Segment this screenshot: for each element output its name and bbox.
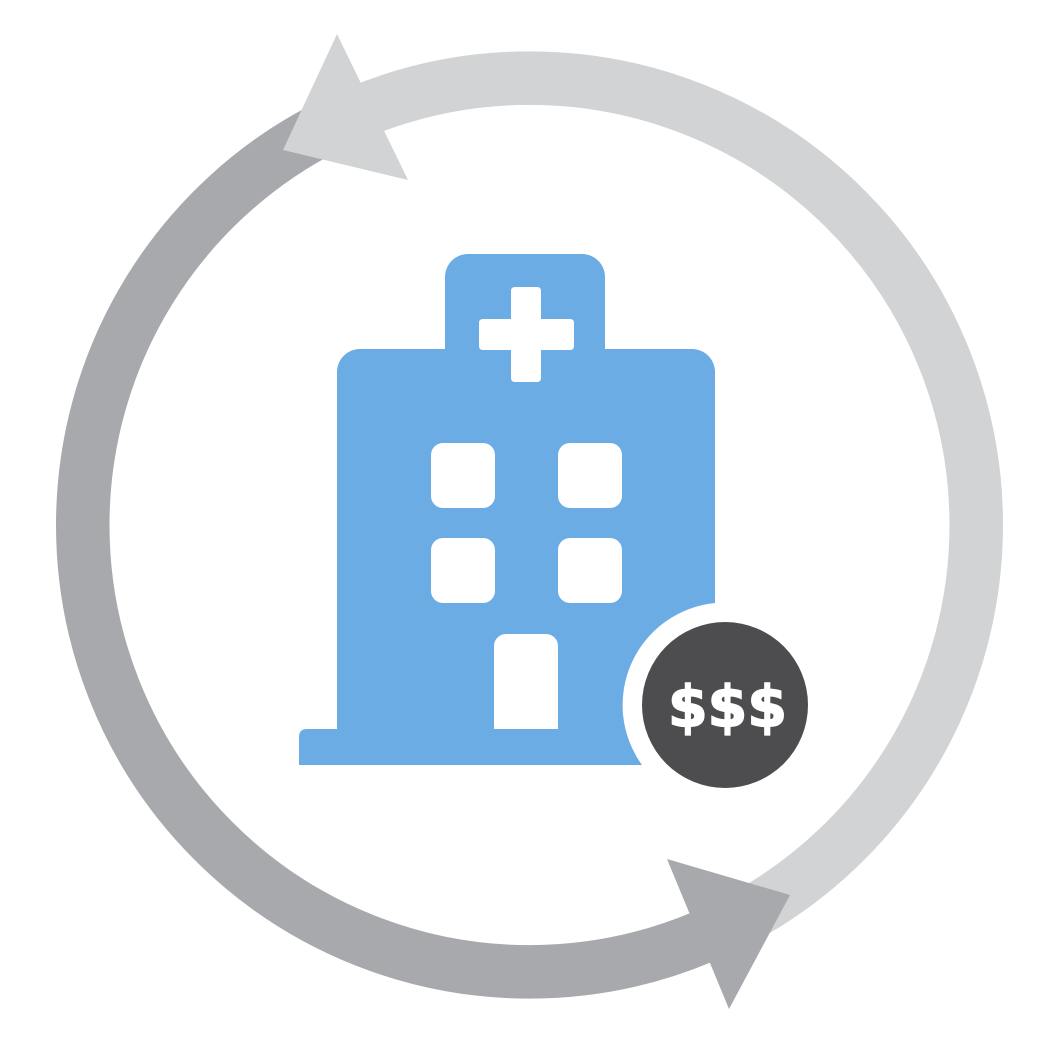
icon: medical cross: [479, 287, 574, 382]
icon: hospital building: [299, 254, 715, 765]
badge: cost circle: [642, 622, 808, 788]
text: dollar signs: $$$: [668, 674, 787, 740]
arrow: dark grey arrowhead: [667, 859, 790, 1009]
arrow: dark grey cycle arrow shaft: [83, 128, 700, 972]
door: [494, 634, 558, 729]
arrow: light grey cycle arrow: [283, 34, 976, 916]
windows: [431, 443, 622, 603]
